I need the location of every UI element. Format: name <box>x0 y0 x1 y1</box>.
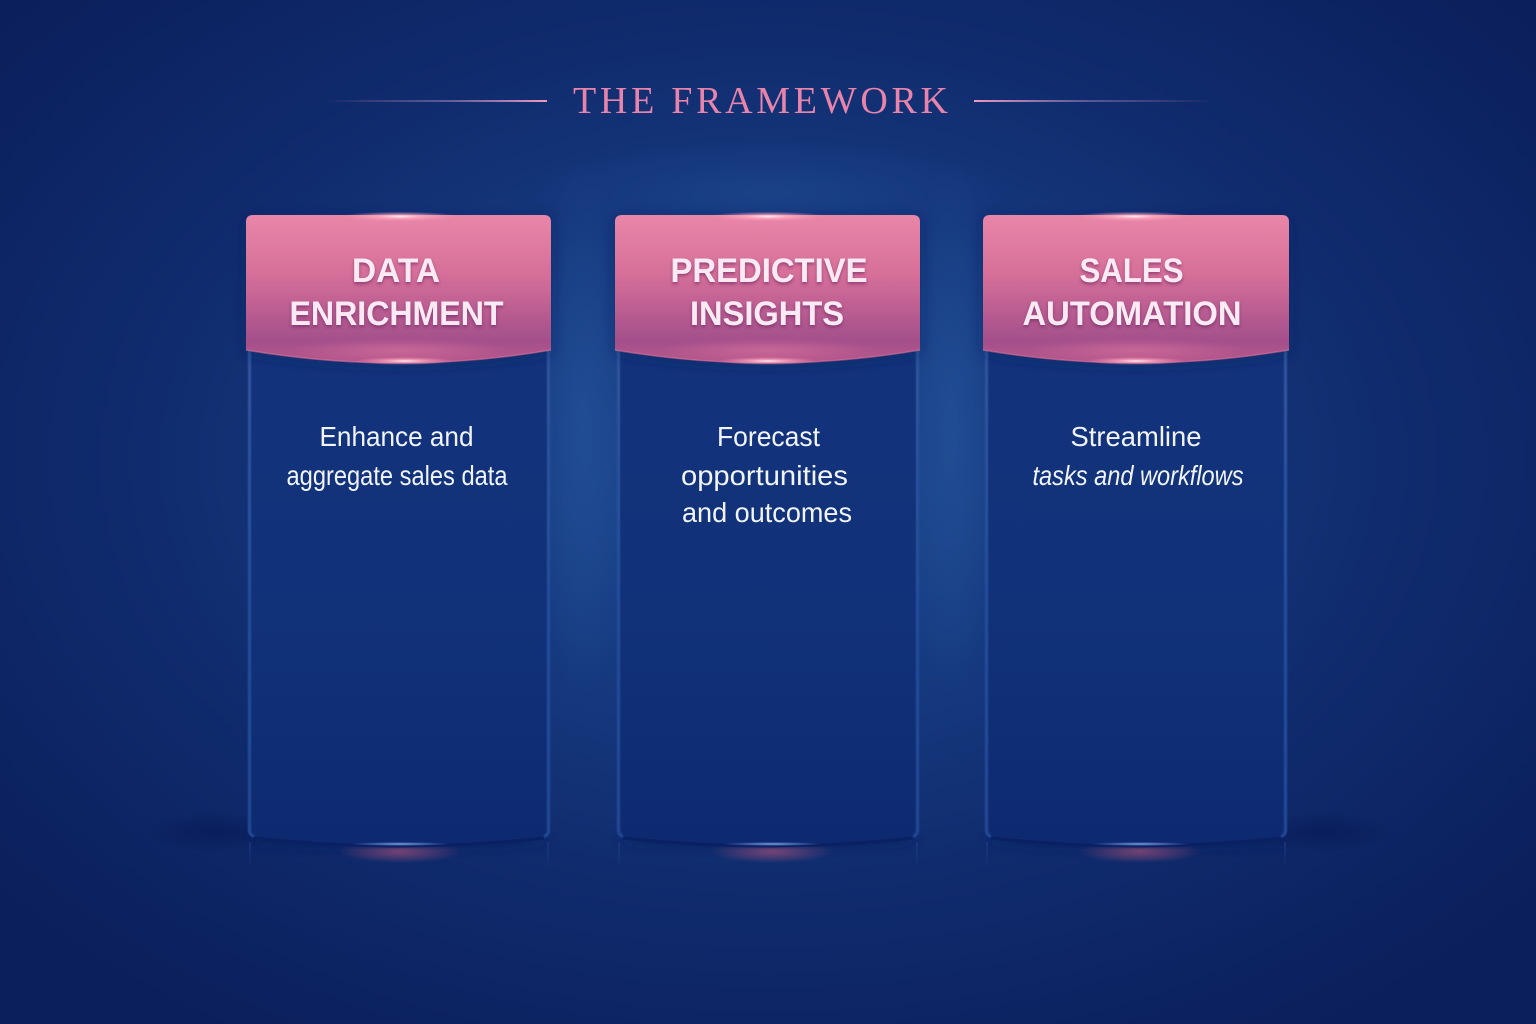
heading: data enrichment <box>290 252 504 333</box>
panel: data enrichment <box>145 212 551 868</box>
heading: data enrichment: ENRICHMENT <box>290 295 504 333</box>
text: predictive insights description <box>681 421 852 528</box>
heading: sales automation <box>1022 252 1242 333</box>
heading: sales automation: AUTOMATION <box>1022 295 1242 333</box>
text: data enrichment description <box>286 421 508 491</box>
text: predictive insights description: opportunities <box>681 460 848 491</box>
title: THE FRAMEWORK <box>573 80 949 122</box>
text: predictive insights description: Forecast <box>717 421 820 452</box>
text: sales automation description: Streamline <box>1070 421 1202 452</box>
text: predictive insights description: and outcomes <box>682 497 852 528</box>
text: sales automation description <box>1032 421 1244 491</box>
panel: sales automation <box>983 212 1392 868</box>
text: data enrichment description: aggregate sales data <box>286 460 508 491</box>
heading: predictive insights <box>670 252 868 333</box>
text: data enrichment description: Enhance and <box>320 421 474 452</box>
heading: predictive insights: INSIGHTS <box>690 295 844 333</box>
panel: predictive insights <box>615 212 920 868</box>
heading: predictive insights: PREDICTIVE <box>670 252 868 290</box>
heading: sales automation: SALES <box>1080 252 1184 290</box>
heading: data enrichment: DATA <box>352 252 440 290</box>
text: sales automation description: tasks and workflows <box>1032 460 1244 491</box>
